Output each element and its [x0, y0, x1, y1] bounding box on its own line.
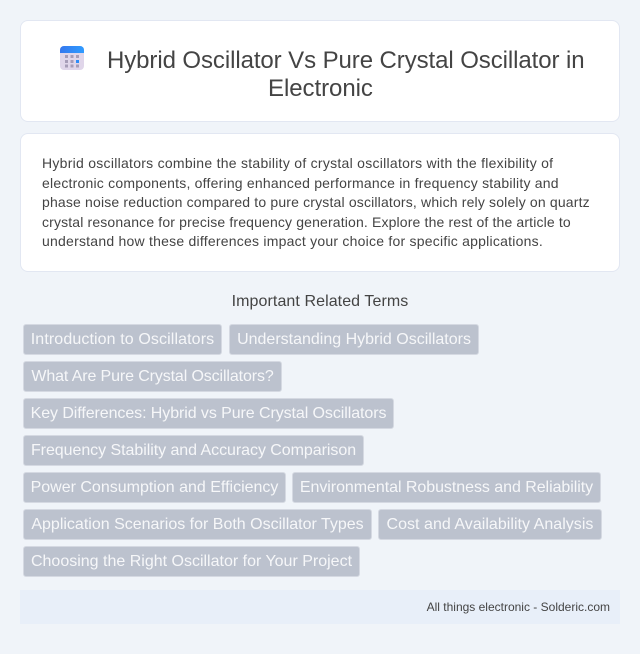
tag [23, 435, 364, 466]
tag: Application Scenarios for Both Oscillator Types [31, 516, 364, 533]
header panel [20, 20, 620, 122]
tag: What Are Pure Crystal Oscillators? [31, 368, 274, 385]
intro paragraph: Hybrid oscillators combine the stability of crystal oscillators with the flexibility of [42, 155, 553, 171]
tag: Key Differences: Hybrid vs Pure Crystal Oscillators [31, 405, 386, 422]
intro paragraph: phase noise reduction compared to pure crystal oscillators, which rely solely on quartz [42, 194, 590, 210]
related terms tags [23, 324, 602, 577]
tag: Choosing the Right Oscillator for Your Project [31, 553, 352, 570]
title: Electronic [268, 75, 373, 102]
tag [292, 472, 601, 503]
intro text panel [20, 133, 620, 272]
tag [23, 546, 360, 577]
intro paragraph: understand how these differences impact your choice for specific applications. [42, 233, 543, 249]
tag [229, 324, 479, 355]
tag: Frequency Stability and Accuracy Comparison [31, 442, 356, 459]
tag [23, 361, 282, 392]
tag [23, 472, 286, 503]
tag: Introduction to Oscillators [31, 331, 214, 348]
footer credit: All things electronic - Solderic.com [427, 600, 610, 614]
heading: important related terms: Important Related Terms [232, 293, 408, 310]
tag [23, 509, 372, 540]
tag [23, 324, 222, 355]
icon: calendar [60, 46, 84, 70]
title: Hybrid Oscillator Vs Pure Crystal Oscillator in [107, 47, 584, 74]
tag: Environmental Robustness and Reliability [300, 479, 593, 496]
intro paragraph: electronic components, offering enhanced performance in frequency stability and [42, 175, 559, 191]
intro paragraph: crystal resonance for precise frequency generation. Explore the rest of the article to [42, 214, 571, 230]
tag [23, 398, 394, 429]
intro paragraph [42, 155, 590, 249]
tag: Cost and Availability Analysis [387, 516, 593, 533]
tag: Understanding Hybrid Oscillators [237, 331, 471, 348]
footer bar [20, 590, 620, 624]
title [107, 47, 584, 102]
tag: Power Consumption and Efficiency [31, 479, 278, 496]
tag [378, 509, 602, 540]
